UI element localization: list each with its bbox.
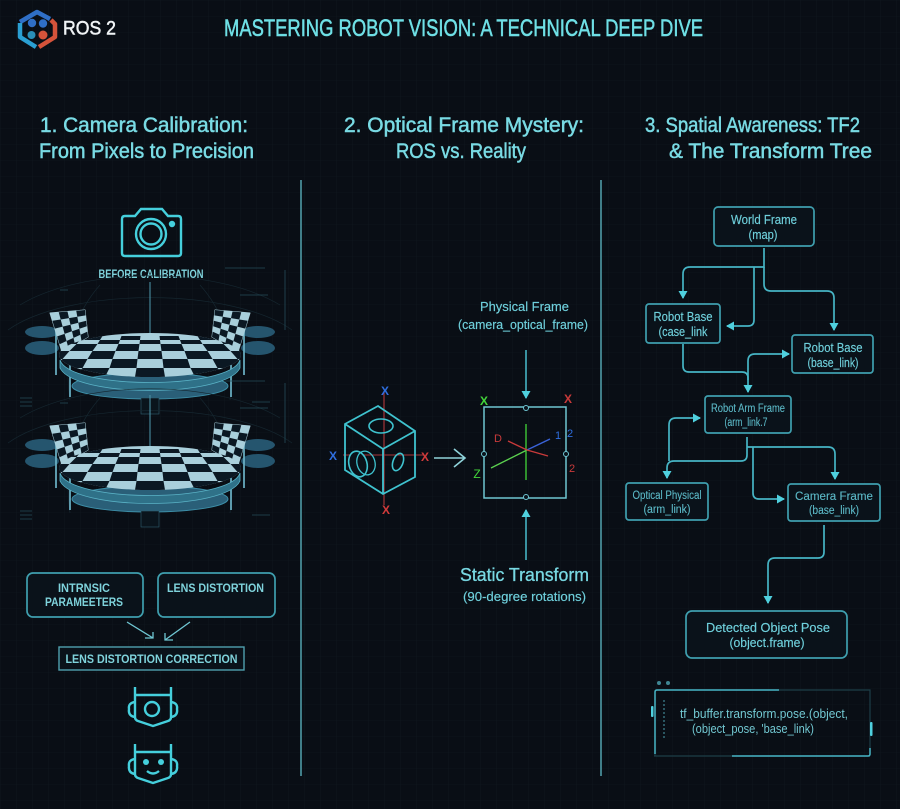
diagram: optical frame with axes: Z [473, 467, 481, 481]
arrow: bottom into frame [525, 510, 527, 560]
icon: smiling robot [129, 744, 177, 783]
box: intrinsic parameters: PARAMEETERS [45, 597, 123, 609]
icon: camera cube with axes [329, 384, 429, 517]
node: robot base base_link: (base_link) [808, 356, 858, 370]
heading: spatial awareness: & The Transform Tree [669, 140, 872, 163]
node: robot base base_link [792, 335, 873, 373]
code block: tf buffer transform: (object_pose, 'base_link) [692, 721, 814, 736]
node: camera frame: (base_link) [809, 505, 859, 517]
node: world frame [714, 207, 814, 246]
code block: tf buffer transform [651, 681, 872, 756]
panel: transform tree [626, 207, 880, 756]
node: robot arm frame: Robot Arm Frame [711, 403, 785, 415]
box: intrinsic parameters [27, 573, 143, 617]
box: lens distortion [158, 573, 275, 617]
diagram: optical frame with axes [473, 392, 575, 500]
icon: camera cube with axes: X [329, 449, 337, 463]
node: robot base case_link: (case_link [658, 325, 708, 339]
title: MASTERING ROBOT VISION: A TECHNICAL DEEP DIVE [224, 15, 703, 42]
node: world frame: (map) [748, 228, 778, 242]
icon: camera cube with axes: X [382, 503, 390, 517]
label: static transform: (90-degree rotations) [463, 590, 586, 604]
node: detected object pose: (object.frame) [730, 636, 804, 650]
node: robot base case_link [646, 304, 720, 343]
label: static transform: Static Transform [460, 565, 589, 585]
panel: optical frame [329, 300, 589, 604]
connectors: tree arrows [667, 248, 835, 603]
node: robot base case_link: Robot Base [654, 310, 713, 324]
node: robot base base_link: Robot Base [804, 341, 863, 355]
chart: distorted checkerboard before calibration [8, 268, 292, 414]
label: physical frame: (camera_optical_frame) [458, 318, 588, 332]
icon: camera cube with axes: X [421, 450, 429, 464]
box: lens distortion: LENS DISTORTION [167, 583, 264, 595]
diagram: optical frame with axes: D [494, 433, 502, 445]
box: intrinsic parameters: INTRNSIC [58, 583, 110, 595]
heading: optical frame mystery: ROS vs. Reality [396, 140, 526, 163]
icon: robot with lens [129, 687, 177, 726]
node: optical physical [626, 483, 708, 520]
heading: spatial awareness: 3. Spatial Awareness: TF2 [645, 114, 860, 137]
logo: ROS 2 [20, 12, 116, 47]
label: static transform [460, 565, 589, 604]
code block: tf buffer transform: tf_buffer.transform.pose.(object, [680, 706, 848, 721]
node: camera frame: Camera Frame [795, 491, 873, 503]
label: physical frame: Physical Frame [480, 300, 569, 314]
node: world frame: World Frame [731, 213, 797, 227]
logo: ROS 2: ROS 2 [63, 18, 116, 40]
node: optical physical: (arm_link) [644, 504, 691, 516]
node: detected object pose [686, 611, 847, 658]
panel: camera calibration [8, 209, 292, 783]
heading: camera calibration: 1. Camera Calibration: [40, 114, 248, 137]
label: physical frame [458, 300, 588, 332]
icon: camera cube with axes: X [381, 384, 389, 398]
diagram: optical frame with axes: 1 [555, 430, 561, 442]
icon: camera [122, 209, 181, 256]
diagram: optical frame with axes: 2 [569, 463, 575, 475]
arrow: top into frame [525, 350, 527, 398]
node: camera frame [788, 484, 880, 521]
node: detected object pose: Detected Object Pose [706, 621, 830, 635]
label: before calibration: BEFORE CALIBRATION [98, 269, 204, 281]
diagram: optical frame with axes: 2 [567, 428, 573, 440]
diagram: optical frame with axes: X [480, 394, 488, 408]
heading: spatial awareness [645, 114, 872, 163]
node: robot arm frame [705, 396, 791, 433]
arrows: to correction [127, 622, 190, 640]
heading: camera calibration: From Pixels to Precision [39, 140, 254, 163]
box: lens distortion correction [59, 647, 244, 670]
chart: checkerboard after calibration [8, 381, 292, 527]
node: robot arm frame: (arm_link.7 [724, 417, 768, 429]
node: optical physical: Optical Physical [632, 490, 702, 502]
diagram: optical frame with axes: X [564, 392, 572, 406]
heading: optical frame mystery [344, 114, 584, 163]
arrow: cube to frame [434, 449, 465, 467]
box: lens distortion correction: LENS DISTORTION CORRECTION [66, 654, 238, 666]
heading: optical frame mystery: 2. Optical Frame Mystery: [344, 114, 584, 137]
heading: camera calibration [39, 114, 254, 163]
